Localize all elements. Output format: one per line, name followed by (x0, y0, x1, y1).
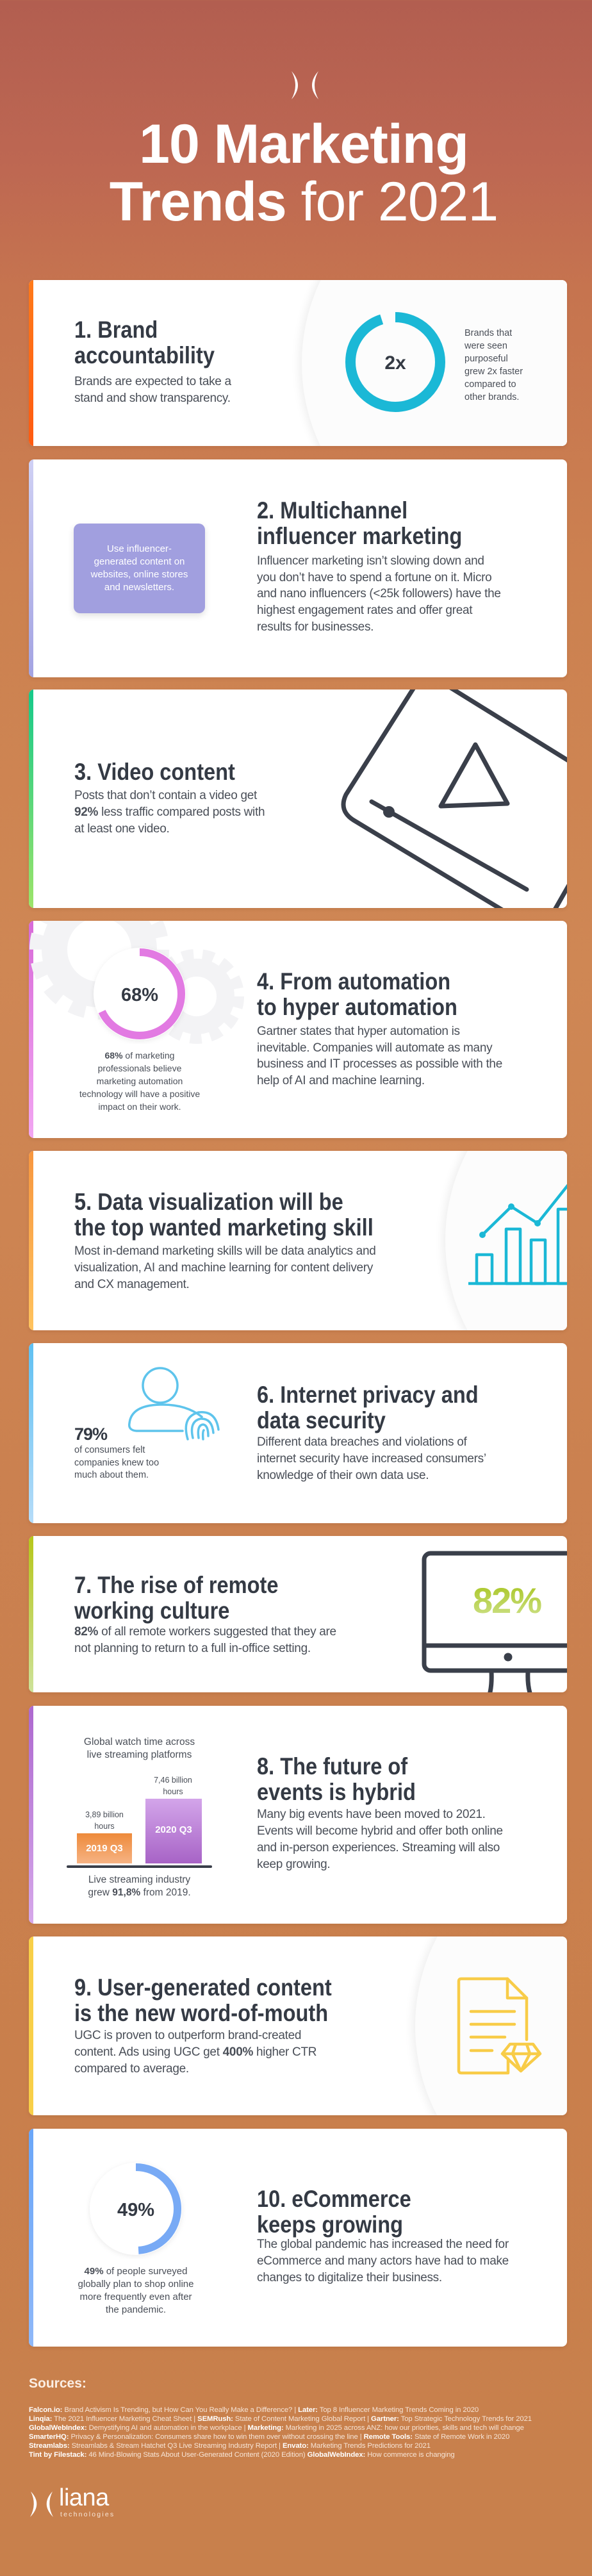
body 6: Different data breaches and violations of (257, 1435, 466, 1449)
body 9 (74, 2029, 317, 2076)
callout box: websites, online stores (91, 569, 188, 580)
panel: 8 hybrid events (29, 1706, 567, 1924)
panel: 5 data visualization (29, 1151, 567, 1330)
heading 2: influencer marketing (257, 523, 462, 549)
body 6 (257, 1435, 486, 1482)
sources heading: Sources: (29, 2376, 86, 2391)
body 4: business and IT processes as possible with the (257, 1057, 502, 1071)
panel: 4 automation (29, 921, 567, 1138)
body 3: at least one video. (74, 822, 170, 836)
body 2: Influencer marketing isn’t slowing down and (257, 554, 484, 568)
bar 2020: 2020 Q3 (155, 1824, 192, 1835)
label 3,89 (85, 1810, 124, 1831)
heading 1: accountability (74, 342, 215, 368)
body 5: and CX management. (74, 1278, 189, 1291)
bar 2020 (145, 1799, 202, 1863)
heading 10: keeps growing (257, 2211, 403, 2238)
heading 2 (257, 497, 462, 549)
body 4: Gartner states that hyper automation is (257, 1025, 460, 1038)
ring chart 68% (94, 948, 186, 1042)
caption 49%: the pandemic. (106, 2304, 166, 2315)
chart title: Global watch time across (84, 1737, 195, 1747)
heading 5: 5. Data visualization will be (74, 1189, 343, 1215)
bar 2019: 2019 Q3 (86, 1843, 123, 1854)
title (110, 113, 498, 233)
body 4 (257, 1025, 502, 1087)
label 3,89: hours (94, 1822, 115, 1831)
body 1: Brands are expected to take a (74, 375, 231, 388)
body 2: highest engagement rates and offer great (257, 604, 472, 617)
body 8: Events will become hybrid and offer both online (257, 1824, 503, 1838)
caption 68%: impact on their work. (98, 1102, 181, 1112)
sources list: Tint by Filestack: 46 Mind-Blowing Stats About User-Generated Content (2020 Edition) GlobalWebIndex: How commerce is changing (29, 2451, 455, 2459)
heading 2: 2. Multichannel (257, 497, 407, 524)
sources list: SmarterHQ: Privacy & Personalization: Consumers share how to win them over without crossing the line | Remote Tools: State of Remote Work in 2020 (29, 2433, 509, 2441)
heading 5: the top wanted marketing skill (74, 1214, 374, 1241)
body 8: keep growing. (257, 1858, 330, 1871)
heading 4: 4. From automation (257, 968, 450, 995)
sources list: Linqia: The 2021 Influencer Marketing Cheat Sheet | SEMRush: State of Content Marketing Global Report | Gartner: Top Strategic Technology Trends for 2021 (29, 2415, 532, 2423)
label 7,46 (154, 1776, 192, 1796)
chart title: live streaming platforms (87, 1749, 192, 1760)
panel: 1 brand accountability (29, 280, 567, 446)
heading 1 (74, 317, 215, 368)
label 3,89: 3,89 billion (85, 1810, 124, 1819)
heading 9: is the new word-of-mouth (74, 2000, 328, 2026)
caption 49%: more frequently even after (79, 2291, 192, 2302)
label 7,46: hours (163, 1787, 183, 1796)
panel: 3 video content (29, 689, 567, 908)
heading 8: events is hybrid (257, 1779, 416, 1805)
body 10: eCommerce and many actors have had to make (257, 2254, 509, 2268)
icon: person with fingerprint (128, 1367, 220, 1441)
sources list: GlobalWebIndex: Demystifying AI and automation in the workplace | Marketing: Marketing in 2025 across ANZ: how our priorities, skills and tech will change (29, 2424, 524, 2432)
body 3: Posts that don’t contain a video get (74, 789, 257, 802)
body 8: and in-person experiences. Streaming will also (257, 1841, 500, 1854)
side text: grew 2x faster (465, 367, 523, 377)
heading 4: to hyper automation (257, 994, 457, 1020)
body 2: and nano influencers (<25k followers) have the (257, 587, 501, 600)
icon: chart (468, 1184, 567, 1285)
body 2: results for businesses. (257, 620, 374, 634)
background gears (29, 921, 244, 1044)
stat 79%: 79% (74, 1424, 107, 1444)
caption 79% (74, 1445, 159, 1480)
caption 79%: much about them. (74, 1470, 149, 1480)
callout box: Use influencer- (107, 543, 172, 554)
chart title (84, 1737, 195, 1760)
footer logo: liana technologies (29, 2489, 119, 2520)
heading 6: 6. Internet privacy and (257, 1382, 479, 1408)
body 10: The global pandemic has increased the need for (257, 2238, 509, 2251)
caption 49%: 49% of people surveyed (85, 2266, 187, 2277)
heading 9 (74, 1974, 332, 2026)
panel: 7 remote working (29, 1536, 567, 1692)
body 9: compared to average. (74, 2062, 189, 2076)
bar 2019 (77, 1833, 132, 1863)
footer logo: liana technologies: technologies (60, 2511, 115, 2518)
body 5 (74, 1244, 375, 1291)
heading 1: 1. Brand (74, 317, 158, 343)
body 1 (74, 375, 232, 405)
heading 9: 9. User-generated content (74, 1974, 332, 2001)
body 7: 82% of all remote workers suggested that they are (74, 1625, 336, 1639)
icon: document with gem (457, 1977, 542, 2075)
body 2: you don’t have to spend a fortune on it. Micro (257, 571, 491, 584)
header logo mark (292, 71, 318, 99)
heading 10: 10. eCommerce (257, 2186, 411, 2212)
side text: Brands that (465, 328, 512, 338)
icon: monitor with 82%: 82% (473, 1580, 541, 1621)
callout box: and newsletters. (104, 582, 174, 593)
body 6: internet security have increased consumers’ (257, 1452, 486, 1466)
caption 68% (79, 1050, 200, 1112)
body 2 (257, 554, 501, 634)
body 7: not planning to return to a full in-office setting. (74, 1642, 311, 1655)
sources list (29, 2406, 532, 2459)
caption 79%: of consumers felt (74, 1445, 145, 1455)
icon: monitor with 82% (422, 1551, 567, 1692)
panel: 6 internet privacy (29, 1343, 567, 1523)
caption 68%: marketing automation (97, 1076, 183, 1086)
side text: purposeful (465, 354, 508, 364)
ring chart 49% (90, 2163, 182, 2257)
heading 5 (74, 1189, 374, 1241)
side text: other brands. (465, 392, 519, 402)
title: Trends for 2021 (110, 171, 498, 233)
chart caption: Live streaming industry (88, 1874, 190, 1885)
body 5: Most in-demand marketing skills will be data analytics and (74, 1244, 375, 1258)
heading 8: 8. The future of (257, 1753, 407, 1779)
chart caption (88, 1874, 191, 1898)
body 3: 92% less traffic compared posts with (74, 805, 265, 819)
body 6: knowledge of their own data use. (257, 1469, 429, 1482)
caption 79%: companies knew too (74, 1457, 159, 1467)
body 4: help of AI and machine learning. (257, 1074, 425, 1087)
body 9: UGC is proven to outperform brand-created (74, 2029, 301, 2042)
caption 68%: technology will have a positive (79, 1089, 200, 1099)
ring chart 2x (345, 312, 445, 412)
panel: 9 user-generated content (29, 1936, 567, 2115)
ring chart 49%: 49% (117, 2200, 154, 2220)
chart caption: grew 91,8% from 2019. (88, 1887, 191, 1898)
body 8: Many big events have been moved to 2021. (257, 1808, 486, 1821)
footer logo: liana technologies: liana (59, 2484, 109, 2511)
caption 68%: professionals believe (98, 1063, 181, 1073)
heading 8 (257, 1753, 416, 1805)
body 10: changes to digitalize their business. (257, 2271, 442, 2284)
ring chart 2x: 2x (384, 352, 406, 374)
callout box: generated content on (94, 556, 185, 567)
panel: 10 ecommerce (29, 2129, 567, 2347)
caption 68%: 68% of marketing (105, 1050, 174, 1061)
title: 10 Marketing (139, 113, 468, 175)
heading 7 (74, 1572, 278, 1624)
side text: were seen (465, 341, 507, 351)
callout box (74, 524, 205, 613)
body 7 (74, 1625, 336, 1655)
body 9: content. Ads using UGC get 400% higher CTR (74, 2045, 317, 2059)
heading 4 (257, 968, 457, 1020)
body 10 (257, 2238, 509, 2284)
heading 6 (257, 1382, 479, 1433)
panel: 2 multichannel influencer marketing (29, 459, 567, 677)
side text (465, 328, 523, 402)
body 8 (257, 1808, 503, 1871)
icon: video player (341, 689, 567, 908)
sources list: Streamlabs: Streamlabs & Stream Hatchet Q3 Live Streaming Industry Report | Envato: Marketing Trends Predictions for 2021 (29, 2442, 431, 2450)
body 3 (74, 789, 265, 836)
label 7,46: 7,46 billion (154, 1776, 192, 1785)
bar chart: live streaming (67, 1737, 212, 1898)
body 5: visualization, AI and machine learning for content delivery (74, 1261, 373, 1275)
body 4: inevitable. Companies will automate as many (257, 1041, 492, 1055)
heading 3: 3. Video content (74, 759, 235, 785)
heading 7: 7. The rise of remote (74, 1572, 278, 1598)
heading 7: working culture (74, 1598, 229, 1624)
sources list: Falcon.io: Brand Activism Is Trending, but How Can You Really Make a Difference? | Later: Top 8 Influencer Marketing Trends Coming in 2020 (29, 2406, 479, 2414)
heading 10 (257, 2186, 411, 2238)
caption 49%: globally plan to shop online (78, 2279, 193, 2290)
caption 49% (78, 2266, 193, 2315)
ring chart 68%: 68% (121, 985, 158, 1005)
body 1: stand and show transparency. (74, 392, 231, 405)
heading 6: data security (257, 1407, 386, 1433)
side text: compared to (465, 379, 516, 390)
